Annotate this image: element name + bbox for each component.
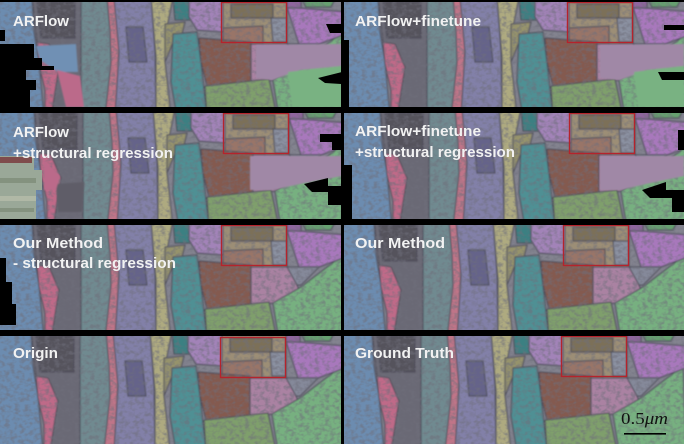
panel label: ARFlow+finetune (355, 13, 481, 30)
panel: ARFlow structural regression (0, 113, 341, 219)
missing flow regions (0, 24, 342, 107)
red highlight box (562, 336, 626, 376)
red highlight box (222, 226, 286, 266)
scale bar: 0.5μm (621, 409, 668, 428)
red highlight box (224, 114, 288, 154)
panel label: ARFlow+finetune (355, 123, 481, 140)
panel label: Ground Truth (355, 345, 454, 362)
red highlight box (222, 2, 286, 42)
panel label: Our Method (355, 235, 445, 252)
interpolated stripes (0, 156, 42, 219)
panel label (13, 124, 173, 162)
red highlight box (564, 226, 628, 266)
missing flow regions (344, 130, 684, 219)
red highlight box (220, 338, 286, 378)
panel: Our Method (344, 225, 684, 330)
panel label: Origin (13, 345, 58, 362)
panel label: +structural regression (13, 145, 173, 162)
panel label: - structural regression (13, 255, 176, 272)
panel label: +structural regression (355, 144, 515, 161)
local segmentation differences (36, 44, 342, 107)
panel: Ground Truth (344, 336, 684, 444)
local segmentation differences (600, 44, 684, 107)
panel label (13, 235, 176, 272)
panel: ARFlow+finetune structural regression (344, 113, 684, 219)
scale bar (622, 413, 668, 435)
panel: Our Method without structural regression (0, 225, 341, 330)
panel: ARFlow (0, 2, 341, 107)
missing flow regions (344, 25, 684, 107)
red highlight box (570, 114, 634, 154)
red highlight box (568, 2, 632, 42)
panel label: Our Method (13, 235, 103, 252)
local segmentation differences (600, 156, 684, 190)
panel: Origin (0, 336, 341, 444)
missing flow regions (0, 258, 16, 325)
panel label (355, 123, 515, 161)
missing flow regions (304, 134, 342, 205)
panel: ARFlow+finetune (344, 2, 684, 107)
panel label: ARFlow (13, 13, 69, 30)
panel label: ARFlow (13, 124, 69, 141)
local segmentation differences (44, 156, 342, 212)
